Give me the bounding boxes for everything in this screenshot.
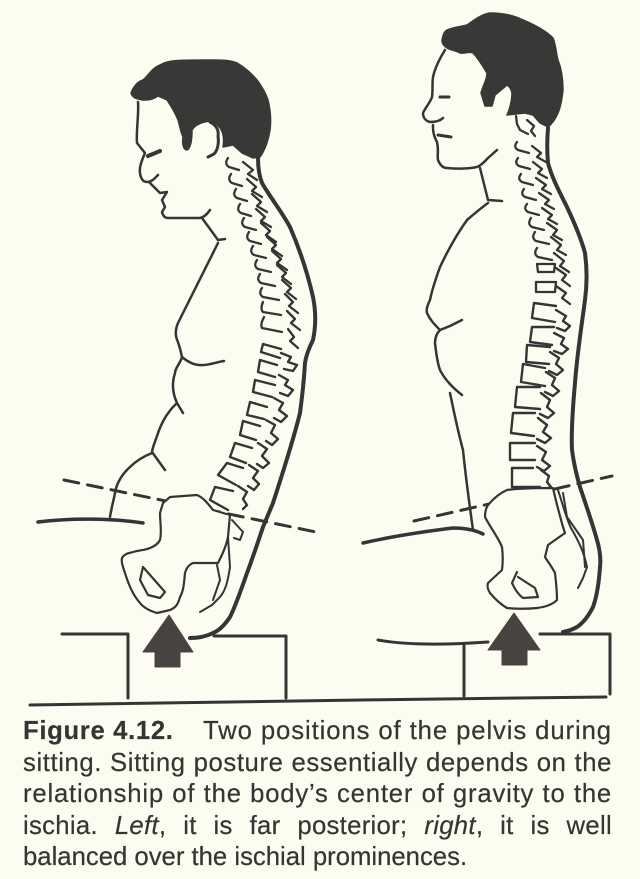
left neck and chest: [110, 218, 225, 517]
right figure: balanced posture: [363, 13, 612, 696]
right sacrum: [558, 490, 587, 588]
left figure: slumped posture: [38, 60, 316, 698]
right arrow: [488, 613, 540, 665]
figure caption: sitting. Sitting posture essentially depends on the: [23, 748, 612, 776]
left back contour: [190, 158, 315, 638]
left face: [137, 102, 210, 218]
right face: [423, 50, 497, 169]
right pelvic tilt line: [414, 476, 612, 521]
right upper spine: [515, 116, 570, 304]
figure caption: ischia. Left, it is far posterior; right, it is well: [23, 812, 612, 840]
figure caption: Two positions of the pelvis during: [203, 717, 612, 745]
left hair: [131, 60, 271, 158]
figure caption: [23, 717, 612, 871]
left ear: [208, 122, 218, 157]
left eye: [148, 151, 160, 156]
figure caption: relationship of the body’s center of gravity to the: [23, 780, 612, 808]
figure caption: balanced over the ischial prominences.: [23, 843, 467, 871]
left thigh: [38, 519, 143, 523]
right eye and brow: [440, 96, 449, 98]
figure caption: Figure 4.12.: [23, 717, 174, 745]
floor line: [30, 697, 606, 705]
right back contour: [547, 128, 600, 632]
left upper spine: [226, 158, 300, 348]
left arrow: [143, 615, 193, 667]
right hair: [442, 13, 563, 127]
right pelvis bone: [485, 488, 565, 609]
left pelvic tilt line: [64, 480, 316, 532]
right neck and chest: [427, 168, 502, 530]
left lumbar vertebrae: [210, 344, 297, 510]
left seat block: [62, 634, 286, 698]
left sacrum: [200, 520, 243, 612]
left rib line: [182, 357, 224, 365]
left pelvis bone: [122, 495, 230, 613]
right seat block: [378, 634, 610, 696]
right mouth: [438, 135, 451, 137]
right thigh: [363, 528, 483, 543]
left obturator foramen: [140, 567, 165, 598]
right lumbar vertebrae: [510, 303, 570, 490]
right obturator foramen: [512, 572, 538, 598]
